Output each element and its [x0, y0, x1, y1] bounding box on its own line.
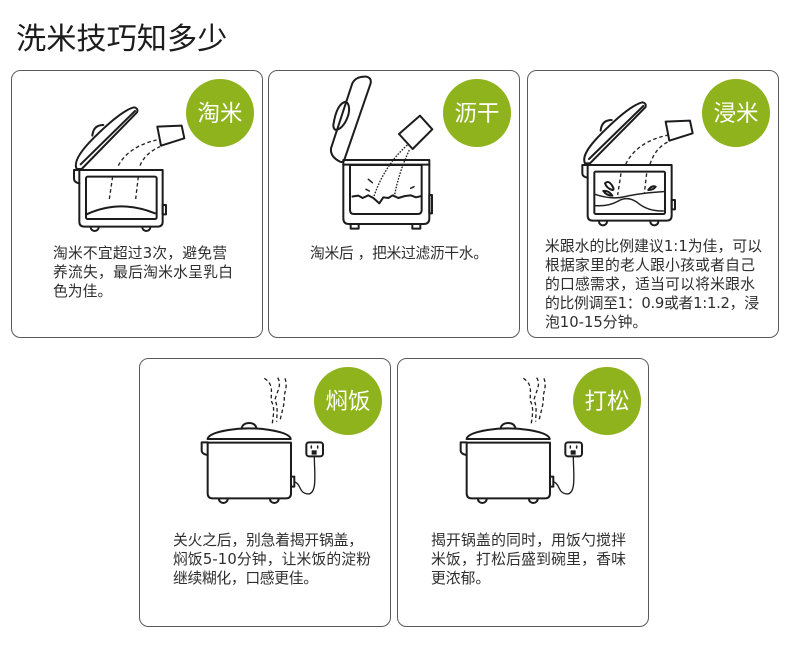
icon: rice cooker soaking	[582, 102, 693, 225]
badge: 打松	[573, 367, 641, 435]
text: 打松 description: 更浓郁。	[431, 570, 490, 587]
panel: 浸米	[528, 70, 778, 338]
text: 打松 description: 揭开锅盖的同时，用饭勺搅拌	[431, 532, 626, 549]
icon: rice cooker steaming	[202, 378, 323, 503]
text: 浸米 description	[545, 238, 762, 331]
badge: 淘米	[186, 79, 254, 147]
badge: 沥干: 沥干	[454, 101, 500, 126]
badge: 打松: 打松	[584, 389, 630, 414]
badge: 浸米: 浸米	[713, 101, 759, 126]
badge: 浸米	[702, 79, 770, 147]
panel: 淘米	[12, 70, 262, 338]
text: 淘米 description: 养流失，最后淘米水呈乳白	[53, 264, 233, 281]
text: 浸米 description: 米跟水的比例建议1:1为佳，可以	[545, 238, 762, 255]
icon: rice cooker plugged in	[461, 378, 582, 503]
text: 焖饭 description	[173, 532, 371, 587]
title: 洗米技巧知多少	[16, 22, 227, 56]
panel: 打松	[398, 358, 648, 626]
panel: 焖饭	[140, 358, 390, 626]
text: 淘米 description	[53, 245, 233, 300]
icon: rice cooker draining	[331, 77, 432, 229]
text: 浸米 description: 泡10-15分钟。	[545, 314, 647, 331]
text: 浸米 description: 根据家里的老人跟小孩或者自己	[545, 257, 755, 274]
badge: 淘米: 淘米	[197, 101, 243, 126]
text: 浸米 description: 的比例调至1：0.9或者1:1.2，浸	[545, 295, 759, 312]
text: 焖饭 description: 继续糊化，口感更佳。	[173, 570, 318, 587]
icon: rice cooker rinsing	[74, 107, 184, 231]
badge: 焖饭: 焖饭	[325, 389, 371, 414]
text: 打松 description: 米饭，打松后盛到碗里，香味	[431, 551, 626, 568]
text: 焖饭 description: 关火之后，别急着揭开锅盖，	[173, 532, 363, 549]
text: 淘米 description: 色为佳。	[53, 283, 112, 300]
text: 浸米 description: 的口感需求，适当可以将米跟水	[545, 276, 755, 293]
text: 打松 description	[431, 532, 626, 587]
text: 焖饭 description: 焖饭5-10分钟，让米饭的淀粉	[173, 551, 371, 568]
text: 沥干 description: 淘米后 ，把米过滤沥干水。	[310, 245, 488, 262]
badge: 焖饭	[314, 367, 382, 435]
badge: 沥干	[443, 79, 511, 147]
panel: 沥干	[268, 70, 520, 338]
text: 淘米 description: 淘米不宜超过3次，避免营	[53, 245, 227, 262]
